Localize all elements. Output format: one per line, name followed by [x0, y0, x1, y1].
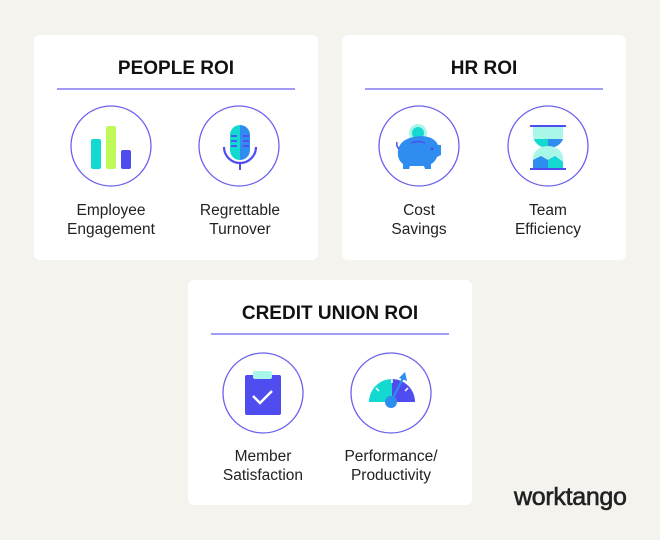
label: team efficiency: Efficiency: [515, 221, 581, 238]
icon: piggy bank: [379, 106, 459, 186]
heading: credit union roi: CREDIT UNION ROI: [242, 303, 418, 324]
label: cost savings: Cost: [403, 202, 435, 219]
label: cost savings: Savings: [391, 221, 447, 238]
label: employee engagement: Engagement: [67, 221, 156, 238]
heading: hr roi: HR ROI: [451, 58, 517, 79]
label: member satisfaction: Member: [235, 448, 291, 465]
label: member satisfaction: Satisfaction: [223, 467, 303, 484]
icon: bar chart: [71, 106, 151, 186]
label: regrettable turnover: Regrettable: [200, 202, 280, 219]
label: team efficiency: Team: [529, 202, 567, 219]
icon: microphone: [199, 106, 279, 186]
label: employee engagement: Employee: [77, 202, 145, 219]
panel: people roi: [34, 35, 318, 260]
label: performance productivity: Performance/: [344, 448, 438, 465]
label: performance productivity: Productivity: [351, 467, 431, 484]
label: regrettable turnover: Turnover: [209, 221, 271, 238]
icon: hourglass: [508, 106, 588, 186]
panel: credit union roi: [188, 280, 472, 505]
icon: gauge: [351, 353, 431, 433]
logo: worktango: worktango: [513, 483, 627, 511]
icon: clipboard: [223, 353, 303, 433]
heading: people roi: PEOPLE ROI: [118, 58, 234, 79]
panel: hr roi: [342, 35, 626, 260]
